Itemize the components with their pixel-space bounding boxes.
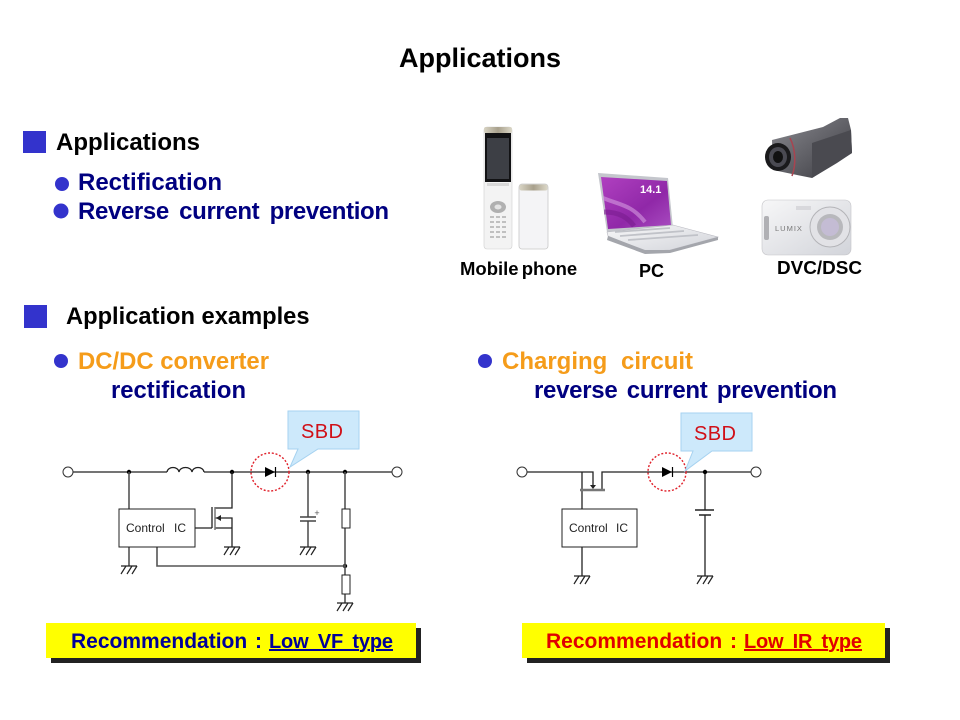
ground symbols xyxy=(574,576,590,584)
orange heading: Charging circuit xyxy=(502,348,693,375)
callout: SBD xyxy=(288,411,359,467)
section heading: application examples xyxy=(24,304,310,330)
icon: laptop PC: 14.1 xyxy=(640,184,661,196)
panel: product photos xyxy=(460,118,862,281)
heading text: Application examples xyxy=(66,304,310,330)
navy subheading: reverse current prevention xyxy=(534,377,837,404)
bullet xyxy=(54,204,68,218)
icon: digital still camera: LUMIX xyxy=(775,224,803,233)
control IC box: Control IC xyxy=(569,521,628,535)
section marker square xyxy=(24,305,47,328)
inductor xyxy=(167,468,204,472)
panel: charging circuit heading xyxy=(478,348,837,404)
callout: recommendation low IR: : xyxy=(730,630,737,653)
panel: DC/DC converter heading xyxy=(54,348,269,404)
bullet xyxy=(55,177,69,191)
label: mobile phone: Mobile phone xyxy=(460,258,577,279)
ground symbols xyxy=(224,547,240,555)
title: Applications xyxy=(399,43,561,73)
callout: recommendation low VF: Recommendation xyxy=(71,630,247,653)
callout: recommendation low IR: Recommendation xyxy=(546,630,722,653)
bullet xyxy=(54,354,68,368)
MOSFET xyxy=(195,472,232,547)
callout: recommendation low VF: : xyxy=(255,630,262,653)
callout: recommendation low VF: Low VF type xyxy=(269,631,393,653)
control IC box xyxy=(562,509,637,547)
list item: Reverse current prevention xyxy=(78,198,389,225)
panel: applications list xyxy=(23,129,389,225)
list item: Rectification xyxy=(78,169,222,196)
callout: SBD: SBD xyxy=(694,423,736,445)
icon: camcorder xyxy=(765,118,852,178)
capacitor xyxy=(300,517,316,521)
resistors xyxy=(342,509,350,528)
callout: SBD xyxy=(681,413,752,471)
P-channel MOSFET xyxy=(580,489,605,491)
bullet xyxy=(478,354,492,368)
battery xyxy=(695,510,714,515)
section heading: Applications xyxy=(56,129,200,156)
chart: charging circuit diagram xyxy=(517,413,761,584)
diode xyxy=(265,467,276,477)
section marker square xyxy=(23,131,46,153)
chart: DC/DC converter circuit diagram xyxy=(63,411,402,611)
callout: SBD: SBD xyxy=(301,421,343,443)
chart: DC/DC converter circuit diagram: + xyxy=(314,508,320,518)
callout: recommendation low IR xyxy=(522,623,890,663)
callout: recommendation low IR: Low IR type xyxy=(744,631,862,653)
diode xyxy=(662,467,672,477)
callout: recommendation low VF xyxy=(46,623,421,663)
icon: mobile phone xyxy=(484,127,548,249)
dashed highlight circle xyxy=(251,453,289,491)
orange heading: DC/DC converter xyxy=(78,348,269,375)
control IC box xyxy=(119,509,195,547)
icon: digital still camera xyxy=(762,200,851,255)
control IC box: Control IC xyxy=(126,521,186,535)
dashed highlight circle xyxy=(648,453,686,491)
label: PC: PC xyxy=(639,261,664,281)
icon: laptop PC xyxy=(598,173,718,254)
navy subheading: rectification xyxy=(111,377,246,404)
label: DVC/DSC: DVC/DSC xyxy=(777,258,862,278)
